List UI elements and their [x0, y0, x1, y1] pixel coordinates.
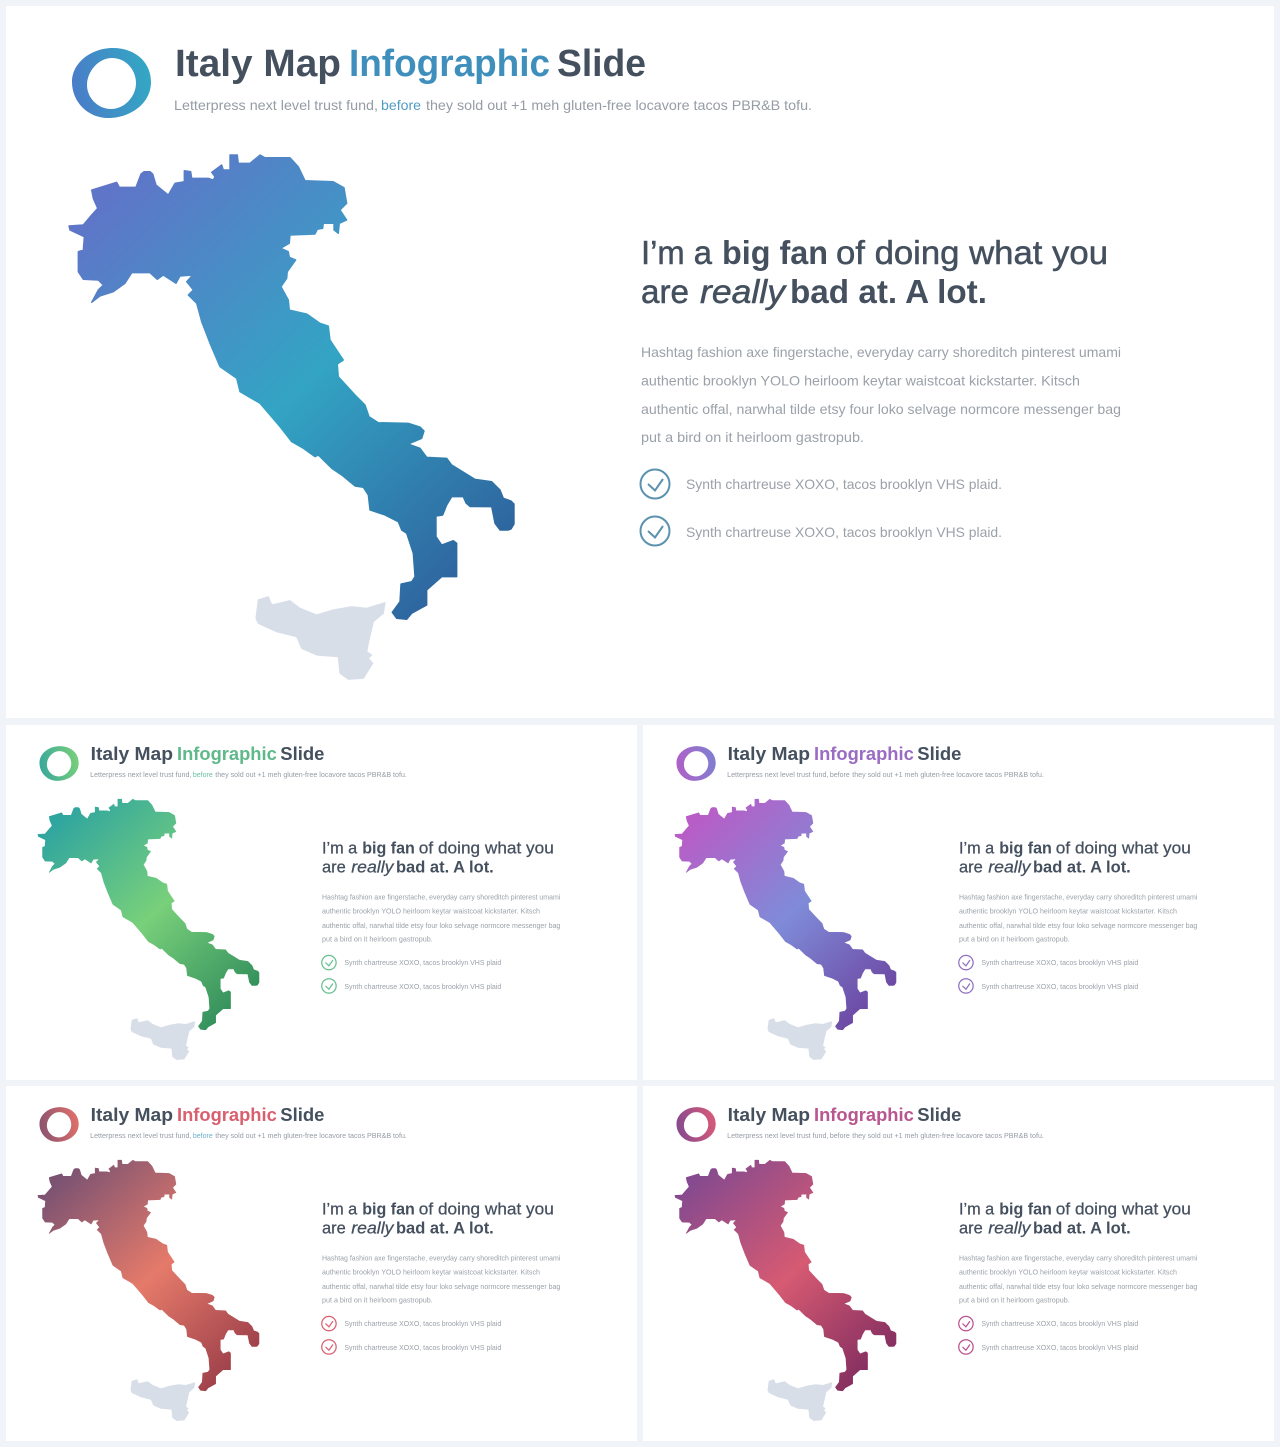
icon: blue ring logo	[72, 48, 151, 118]
title: Infographic	[177, 743, 277, 764]
body paragraph: authentic brooklyn YOLO heirloom keytar waistcoat kickstarter. Kitsch	[959, 1270, 1177, 1277]
body paragraph: authentic brooklyn YOLO heirloom keytar waistcoat kickstarter. Kitsch	[322, 1270, 540, 1277]
title: Slide	[917, 743, 961, 764]
checklist item 2	[640, 516, 1002, 546]
heading: of doing what you	[1056, 1200, 1191, 1218]
checklist item 1: Synth chartreuse XOXO, tacos brooklyn VHS plaid	[981, 960, 1138, 967]
title: Italy Map	[175, 43, 341, 85]
heading: are	[322, 859, 346, 877]
title	[91, 1104, 324, 1125]
heading: bad at. A lot.	[396, 859, 494, 877]
map of Sicily	[131, 1019, 195, 1060]
icon: red ring logo	[39, 1107, 79, 1142]
subtitle: Letterpress next level trust fund,	[90, 1133, 191, 1140]
title: Slide	[280, 743, 324, 764]
subtitle: before	[193, 772, 213, 779]
body paragraph: Hashtag fashion axe fingerstache, everyday carry shoreditch pinterest umami	[641, 344, 1121, 360]
heading	[322, 1200, 554, 1238]
icon: purple ring logo	[676, 746, 716, 781]
checklist item 2	[322, 979, 501, 993]
heading: are	[322, 1220, 346, 1238]
checklist item 1	[322, 1316, 501, 1331]
title: Infographic	[349, 43, 550, 85]
heading: are	[641, 273, 689, 310]
title: Infographic	[814, 743, 914, 764]
heading: I’m a	[959, 839, 995, 857]
checklist item 2: Synth chartreuse XOXO, tacos brooklyn VHS plaid	[344, 1345, 501, 1352]
map of Italy mainland	[675, 1160, 896, 1391]
heading: are	[959, 1220, 983, 1238]
subtitle: before	[830, 1133, 850, 1140]
heading: I’m a	[322, 839, 358, 857]
body paragraph: put a bird on it heirloom gastropub.	[641, 429, 864, 445]
checklist item 1: Synth chartreuse XOXO, tacos brooklyn VHS plaid	[344, 960, 501, 967]
body paragraph: put a bird on it heirloom gastropub.	[322, 937, 433, 944]
heading: big fan	[722, 234, 828, 271]
body paragraph	[322, 895, 561, 944]
body paragraph: authentic offal, narwhal tilde etsy four loko selvage normcore messenger bag	[959, 923, 1197, 930]
body paragraph: put a bird on it heirloom gastropub.	[959, 937, 1070, 944]
subtitle: they sold out +1 meh gluten-free locavore tacos PBR&B tofu.	[215, 772, 407, 779]
map of Sicily	[256, 597, 385, 679]
icon: crimson ring logo	[676, 1107, 716, 1142]
checklist item 1: Synth chartreuse XOXO, tacos brooklyn VHS plaid	[981, 1321, 1138, 1328]
heading: of doing what you	[1056, 839, 1191, 857]
body paragraph: put a bird on it heirloom gastropub.	[959, 1298, 1070, 1305]
subtitle	[174, 97, 812, 113]
heading: I’m a	[641, 234, 713, 271]
heading: really	[700, 273, 788, 310]
icon: green ring logo	[39, 746, 79, 781]
heading: I’m a	[959, 1200, 995, 1218]
body paragraph: authentic offal, narwhal tilde etsy four loko selvage normcore messenger bag	[959, 1284, 1197, 1291]
subtitle	[727, 772, 1044, 779]
subtitle: before	[193, 1133, 213, 1140]
body paragraph: authentic brooklyn YOLO heirloom keytar waistcoat kickstarter. Kitsch	[959, 909, 1177, 916]
heading	[641, 234, 1108, 310]
title: Italy Map	[91, 1104, 173, 1125]
subtitle: Letterpress next level trust fund,	[727, 772, 828, 779]
panel: green slide	[6, 725, 637, 1080]
title: Italy Map	[728, 1104, 810, 1125]
heading	[959, 839, 1191, 877]
checklist item 1: Synth chartreuse XOXO, tacos brooklyn VHS plaid.	[686, 476, 1002, 492]
subtitle: they sold out +1 meh gluten-free locavore tacos PBR&B tofu.	[852, 1133, 1044, 1140]
heading	[959, 1200, 1191, 1238]
subtitle	[727, 1133, 1044, 1140]
title	[728, 743, 961, 764]
body paragraph: authentic brooklyn YOLO heirloom keytar waistcoat kickstarter. Kitsch	[322, 909, 540, 916]
subtitle: before	[830, 772, 850, 779]
checklist item 2	[959, 979, 1138, 993]
checklist item 2	[959, 1340, 1138, 1354]
title: Infographic	[814, 1104, 914, 1125]
checklist item 2	[322, 1340, 501, 1354]
checklist item 1	[959, 1316, 1138, 1331]
body paragraph: authentic offal, narwhal tilde etsy four loko selvage normcore messenger bag	[322, 1284, 560, 1291]
title: Italy Map	[728, 743, 810, 764]
title	[728, 1104, 961, 1125]
checklist item 2: Synth chartreuse XOXO, tacos brooklyn VHS plaid	[981, 984, 1138, 991]
heading: bad at. A lot.	[790, 273, 987, 310]
heading	[322, 839, 554, 877]
heading: bad at. A lot.	[396, 1220, 494, 1238]
subtitle	[90, 1133, 407, 1140]
panel: main blue slide	[6, 6, 1274, 718]
subtitle: they sold out +1 meh gluten-free locavore tacos PBR&B tofu.	[215, 1133, 407, 1140]
checklist item 1: Synth chartreuse XOXO, tacos brooklyn VHS plaid	[344, 1321, 501, 1328]
checklist item 2: Synth chartreuse XOXO, tacos brooklyn VHS plaid	[981, 1345, 1138, 1352]
body paragraph: Hashtag fashion axe fingerstache, everyday carry shoreditch pinterest umami	[322, 895, 561, 902]
subtitle: Letterpress next level trust fund,	[727, 1133, 828, 1140]
title	[175, 43, 646, 85]
heading: of doing what you	[419, 839, 554, 857]
checklist item 1	[322, 955, 501, 970]
body paragraph: authentic offal, narwhal tilde etsy four loko selvage normcore messenger bag	[322, 923, 560, 930]
checklist item 1	[640, 470, 1002, 498]
heading: bad at. A lot.	[1033, 859, 1131, 877]
subtitle	[90, 772, 407, 779]
heading: of doing what you	[836, 234, 1108, 271]
body paragraph: put a bird on it heirloom gastropub.	[322, 1298, 433, 1305]
heading: really	[988, 859, 1032, 877]
body paragraph: authentic brooklyn YOLO heirloom keytar waistcoat kickstarter. Kitsch	[641, 372, 1080, 388]
body paragraph: Hashtag fashion axe fingerstache, everyday carry shoreditch pinterest umami	[322, 1256, 561, 1263]
subtitle: Letterpress next level trust fund,	[174, 97, 378, 113]
map of Italy mainland	[675, 799, 896, 1030]
heading: big fan	[362, 1200, 415, 1218]
heading: really	[988, 1220, 1032, 1238]
title: Slide	[557, 43, 646, 85]
heading: big fan	[362, 839, 415, 857]
map of Italy mainland	[69, 155, 514, 619]
map of Italy mainland	[38, 799, 259, 1030]
title: Slide	[917, 1104, 961, 1125]
checklist item 2: Synth chartreuse XOXO, tacos brooklyn VHS plaid.	[686, 524, 1002, 540]
body paragraph: authentic offal, narwhal tilde etsy four loko selvage normcore messenger bag	[641, 401, 1121, 417]
subtitle: Letterpress next level trust fund,	[90, 772, 191, 779]
subtitle: they sold out +1 meh gluten-free locavore tacos PBR&B tofu.	[426, 97, 812, 113]
body paragraph	[322, 1256, 561, 1305]
heading: of doing what you	[419, 1200, 554, 1218]
heading: are	[959, 859, 983, 877]
body paragraph	[641, 344, 1121, 445]
map of Italy mainland	[38, 1160, 259, 1391]
heading: really	[351, 859, 395, 877]
checklist item 1	[959, 955, 1138, 970]
map of Sicily	[131, 1380, 195, 1421]
heading: big fan	[999, 1200, 1052, 1218]
title	[91, 743, 324, 764]
body paragraph	[959, 1256, 1198, 1305]
body paragraph	[959, 895, 1198, 944]
subtitle: they sold out +1 meh gluten-free locavore tacos PBR&B tofu.	[852, 772, 1044, 779]
panel: crimson slide	[643, 1086, 1274, 1441]
panel: red slide	[6, 1086, 637, 1441]
map of Sicily	[768, 1380, 832, 1421]
heading: I’m a	[322, 1200, 358, 1218]
heading: bad at. A lot.	[1033, 1220, 1131, 1238]
title: Italy Map	[91, 743, 173, 764]
panel: purple slide	[643, 725, 1274, 1080]
heading: big fan	[999, 839, 1052, 857]
subtitle: before	[381, 97, 421, 113]
map of Sicily	[768, 1019, 832, 1060]
heading: really	[351, 1220, 395, 1238]
title: Infographic	[177, 1104, 277, 1125]
body paragraph: Hashtag fashion axe fingerstache, everyday carry shoreditch pinterest umami	[959, 1256, 1198, 1263]
checklist item 2: Synth chartreuse XOXO, tacos brooklyn VHS plaid	[344, 984, 501, 991]
body paragraph: Hashtag fashion axe fingerstache, everyday carry shoreditch pinterest umami	[959, 895, 1198, 902]
title: Slide	[280, 1104, 324, 1125]
